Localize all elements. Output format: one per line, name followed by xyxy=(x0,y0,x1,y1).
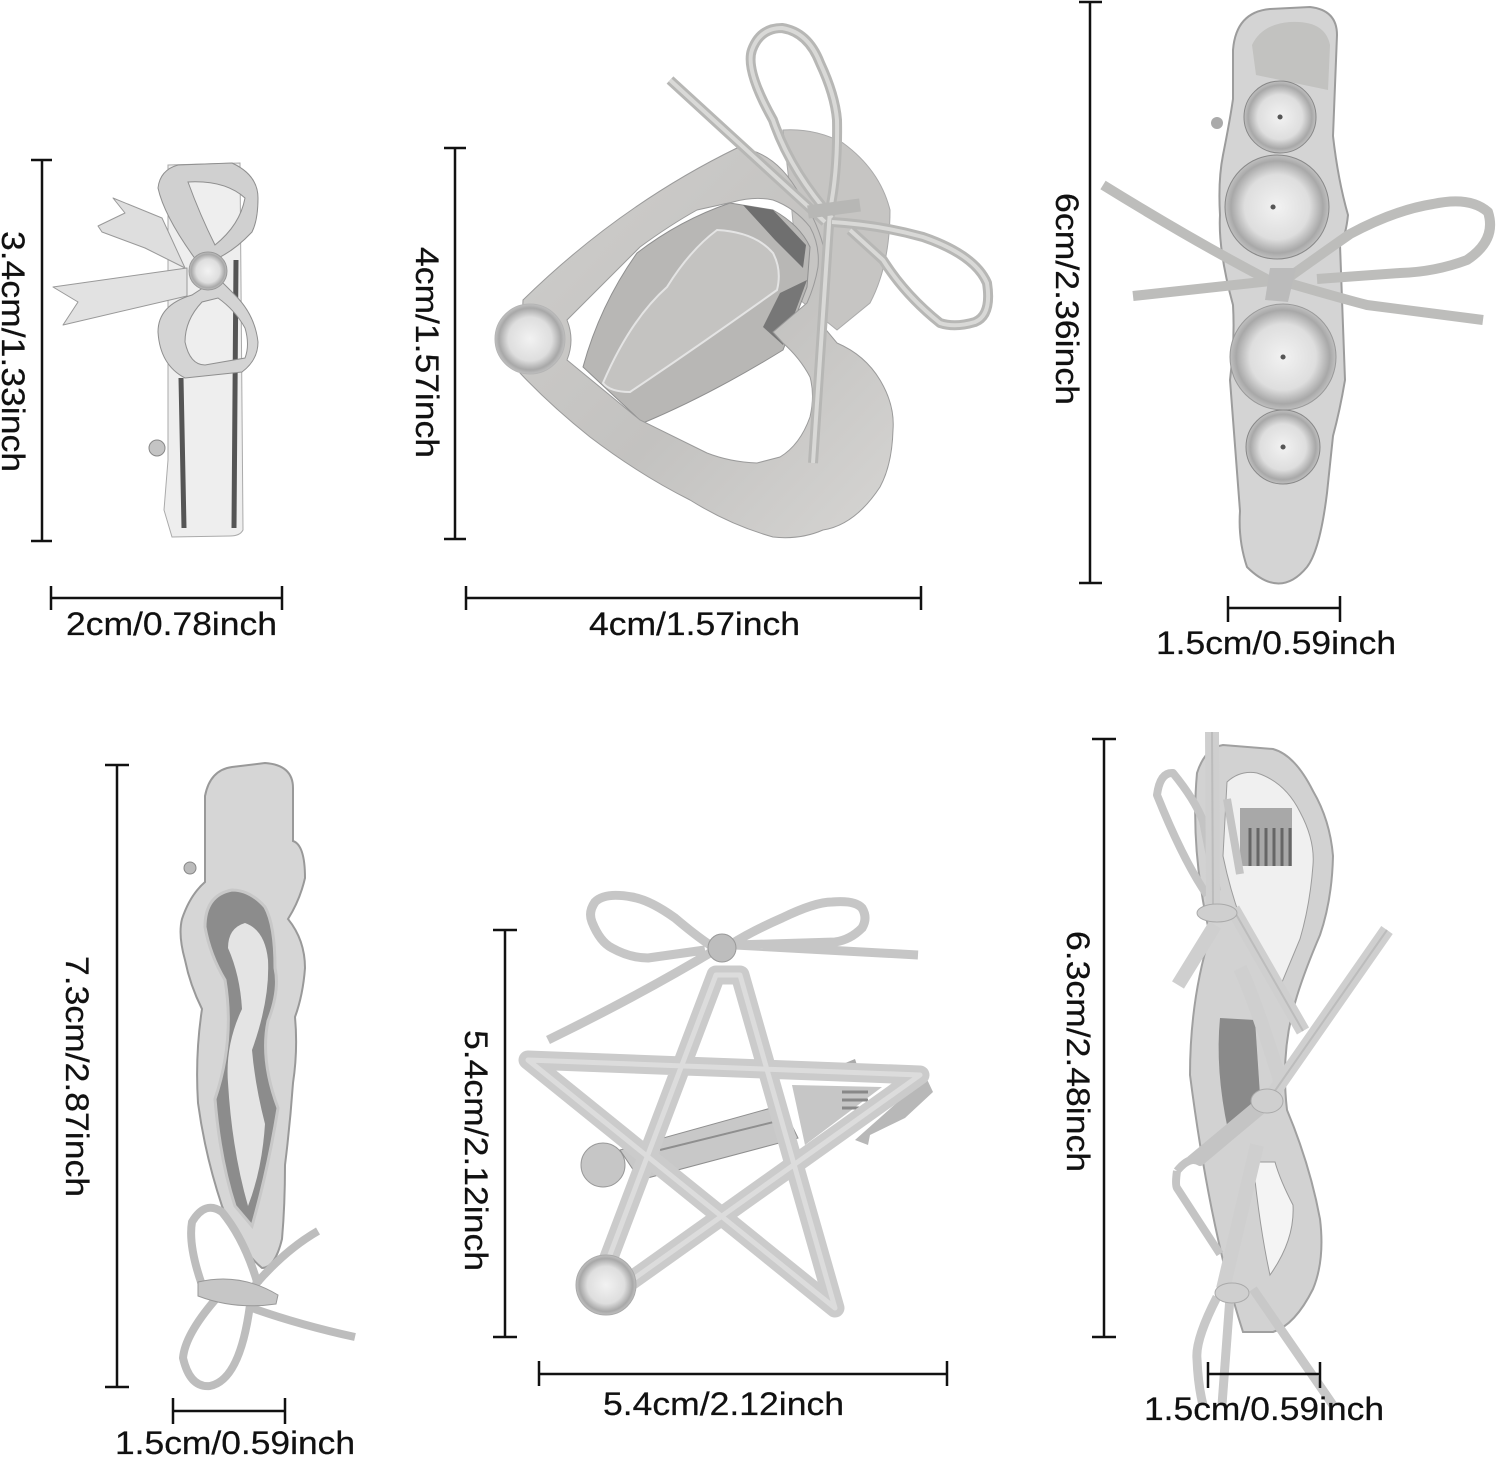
dimension: width 5.4cm: 5.4cm/2.12inch xyxy=(603,1386,844,1422)
dimension: height 7.3cm: 7.3cm/2.87inch xyxy=(59,956,95,1197)
dimension: width 1.5cm: 1.5cm/0.59inch xyxy=(1156,625,1396,661)
dimension: width 4cm xyxy=(466,586,921,642)
panel: wavy clip xyxy=(59,763,355,1458)
dimension: height 4cm xyxy=(409,148,466,539)
dimension: width 1.5cm xyxy=(1144,1362,1384,1427)
dimension: height 5.4cm: 5.4cm/2.12inch xyxy=(458,1030,494,1271)
dimension: height 6.3cm xyxy=(1060,739,1116,1337)
icon: heart clip xyxy=(495,28,988,538)
dimension: width 1.5cm xyxy=(115,1398,355,1458)
panel: star clip xyxy=(458,895,947,1422)
icon: beaded clip xyxy=(1103,7,1490,584)
dimension: width 2cm: 2cm/0.78inch xyxy=(66,606,277,642)
dimension: height 6cm: 6cm/2.36inch xyxy=(1049,193,1085,405)
panel: heart clip xyxy=(409,28,988,642)
icon: star clip xyxy=(528,895,933,1315)
dimension: height 7.3cm xyxy=(59,765,129,1387)
dimension: width 5.4cm xyxy=(539,1361,947,1422)
dimension: height 6.3cm: 6.3cm/2.48inch xyxy=(1060,931,1096,1172)
dimension: width 1.5cm: 1.5cm/0.59inch xyxy=(1144,1391,1384,1427)
dimension: height 3.4cm xyxy=(0,160,52,541)
panel: beaded clip xyxy=(1049,2,1490,661)
dimension: height 6cm xyxy=(1049,2,1102,583)
dimension: width 4cm: 4cm/1.57inch xyxy=(589,606,800,642)
icon: wavy clip xyxy=(181,763,355,1386)
panel: bow clip xyxy=(0,160,282,642)
panel: slim bow clip xyxy=(1060,732,1387,1427)
dimension: width 2cm xyxy=(51,586,282,642)
dimension: height 5.4cm xyxy=(458,930,517,1337)
icon: slim bow clip xyxy=(1157,732,1387,1405)
icon: bow clip xyxy=(53,163,258,537)
dimension: height 4cm: 4cm/1.57inch xyxy=(409,247,445,458)
dimension: width 1.5cm xyxy=(1156,596,1396,661)
